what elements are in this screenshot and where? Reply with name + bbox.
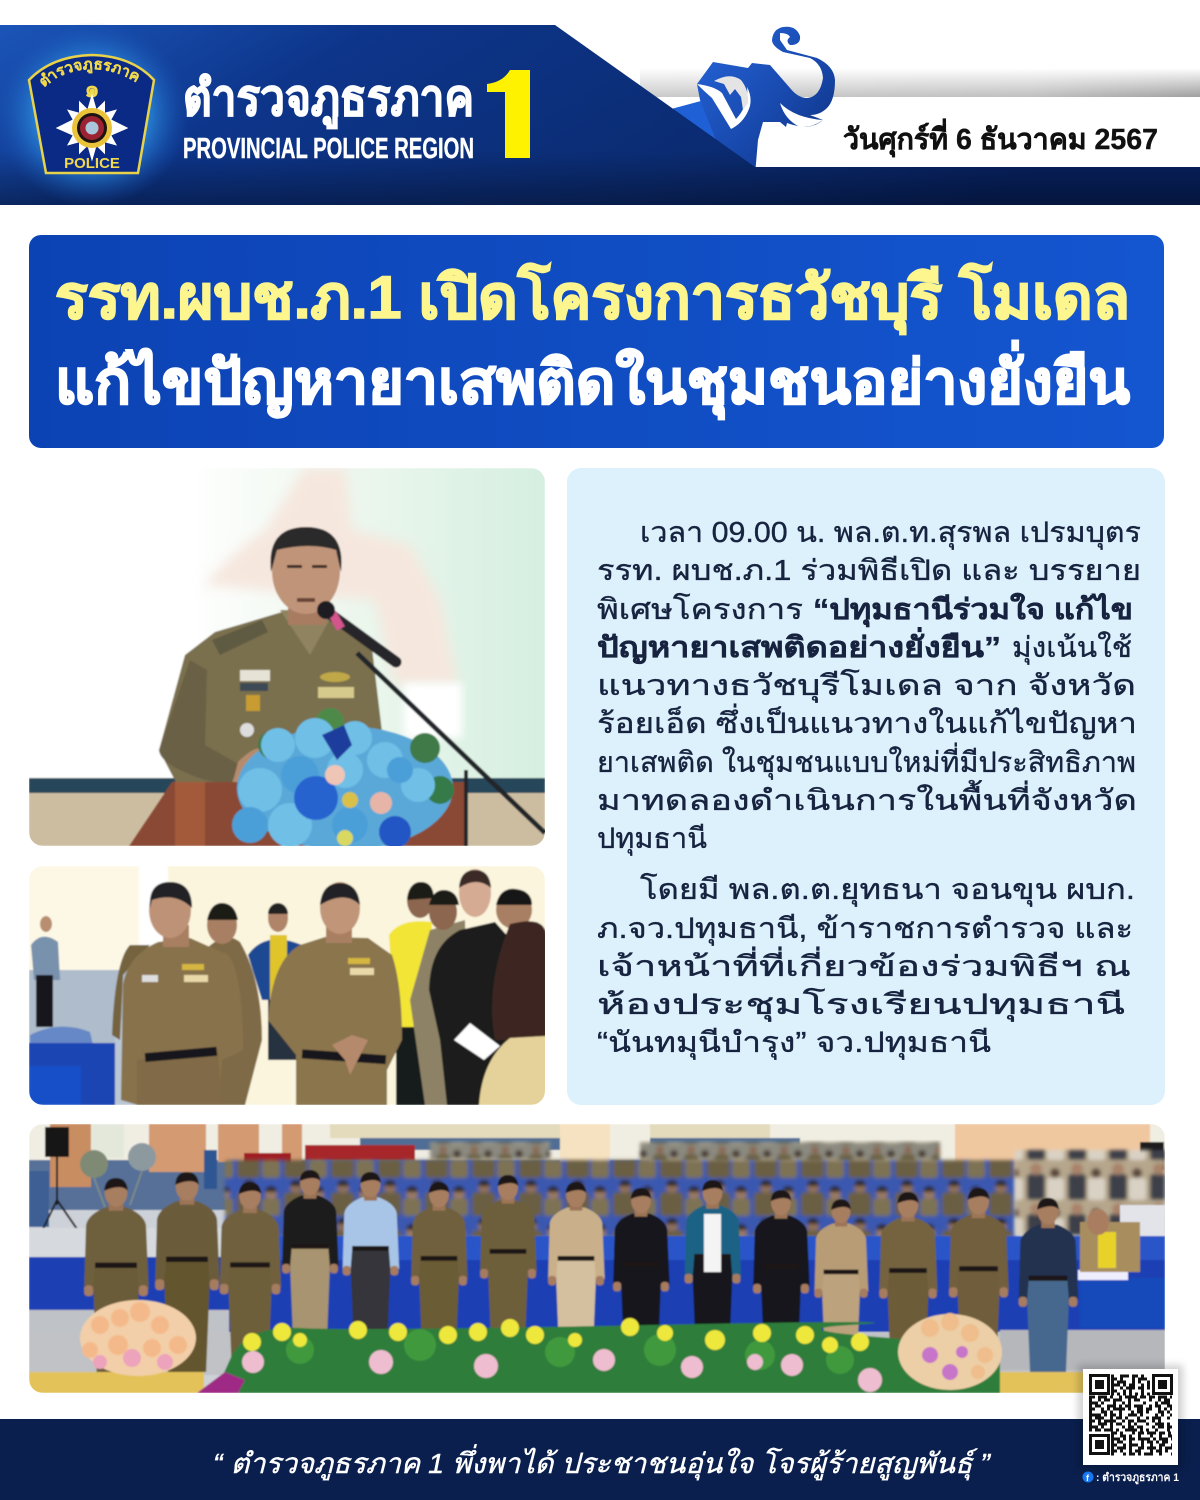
paragraph one: ปทุมธานี — [597, 823, 707, 856]
footer band — [0, 1419, 1200, 1500]
police badge — [8, 24, 181, 202]
paragraph one — [597, 517, 1141, 856]
qr code — [1078, 1365, 1183, 1469]
police badge: POLICE — [64, 155, 120, 172]
paragraph one: แนวทางธวัชบุรีโมเดล จาก จังหวัด — [597, 669, 1136, 703]
header title english: PROVINCIAL POLICE REGION — [183, 133, 474, 165]
paragraph one: ปัญหายาเสพติดอย่างยั่งยืน” — [597, 627, 1001, 665]
paragraph two: เจ้าหน้าที่ที่เกี่ยวข้องร่วมพิธีฯ ณ — [597, 947, 1131, 983]
police badge: ๑ — [84, 76, 100, 103]
big number 1 — [487, 70, 530, 158]
paragraph one: มาทดลองดำเนินการในพื้นที่จังหวัด — [597, 780, 1137, 817]
paragraph one: ร้อยเอ็ด ซึ่งเป็นแนวทางในแก้ไขปัญหา — [597, 704, 1137, 740]
headline line 2: แก้ไขปัญหายาเสพติดในชุมชนอย่างยั่งยืน — [55, 340, 1130, 420]
paragraph two — [597, 873, 1135, 1060]
paragraph one: เวลา 09.00 น. พล.ต.ท.สุรพล เปรมบุตร — [640, 517, 1141, 550]
headline line 1: รรท.ผบช.ภ.1 เปิดโครงการธวัชบุรี โมเดล — [55, 262, 1130, 335]
footer slogan: “ ตำรวจภูธรภาค 1 พึ่งพาได้ ประชาชนอุ่นใจ โจรผู้ร้ายสูญพันธุ์ ” — [213, 1444, 992, 1481]
police badge: ตำรวจภูธรภาค — [40, 60, 139, 88]
photo: officers walking — [29, 866, 546, 1105]
facebook credit: : ตำรวจภูธรภาค 1 — [1096, 1471, 1179, 1485]
header title thai: ตำรวจภูธรภาค — [183, 70, 474, 129]
paragraph one: ยาเสพติด ในชุมชนแบบใหม่ที่มีประสิทธิภาพ — [597, 743, 1136, 780]
paragraph two: “นันทมุนีบำรุง” จว.ปทุมธานี — [597, 1027, 991, 1060]
paragraph one: “ปทุมธานีร่วมใจ แก้ไข — [813, 592, 1133, 627]
paragraph one: พิเศษโครงการ — [597, 593, 803, 626]
photo: speaker at podium — [29, 468, 545, 850]
photo: group portrait — [29, 1124, 1165, 1393]
paragraph two: ภ.จว.ปทุมธานี, ข้าราชการตำรวจ และ — [597, 913, 1133, 946]
paragraph one: รรท. ผบช.ภ.1 ร่วมพิธีเปิด และ บรรยาย — [597, 555, 1141, 587]
paragraph two: ห้องประชุมโรงเรียนปทุมธานี — [597, 988, 1125, 1022]
header band — [0, 24, 1200, 205]
paragraph one: มุ่งเน้นใช้ — [1012, 631, 1132, 665]
date: วันศุกร์ที่ 6 ธันวาคม 2567 — [843, 118, 1158, 157]
icon: elephant logo — [660, 27, 835, 175]
panel: article text — [567, 468, 1165, 1105]
title panel — [29, 235, 1164, 448]
paragraph two: โดยมี พล.ต.ต.ยุทธนา จอนขุน ผบก. — [640, 873, 1135, 907]
facebook credit: f — [1086, 1473, 1090, 1483]
